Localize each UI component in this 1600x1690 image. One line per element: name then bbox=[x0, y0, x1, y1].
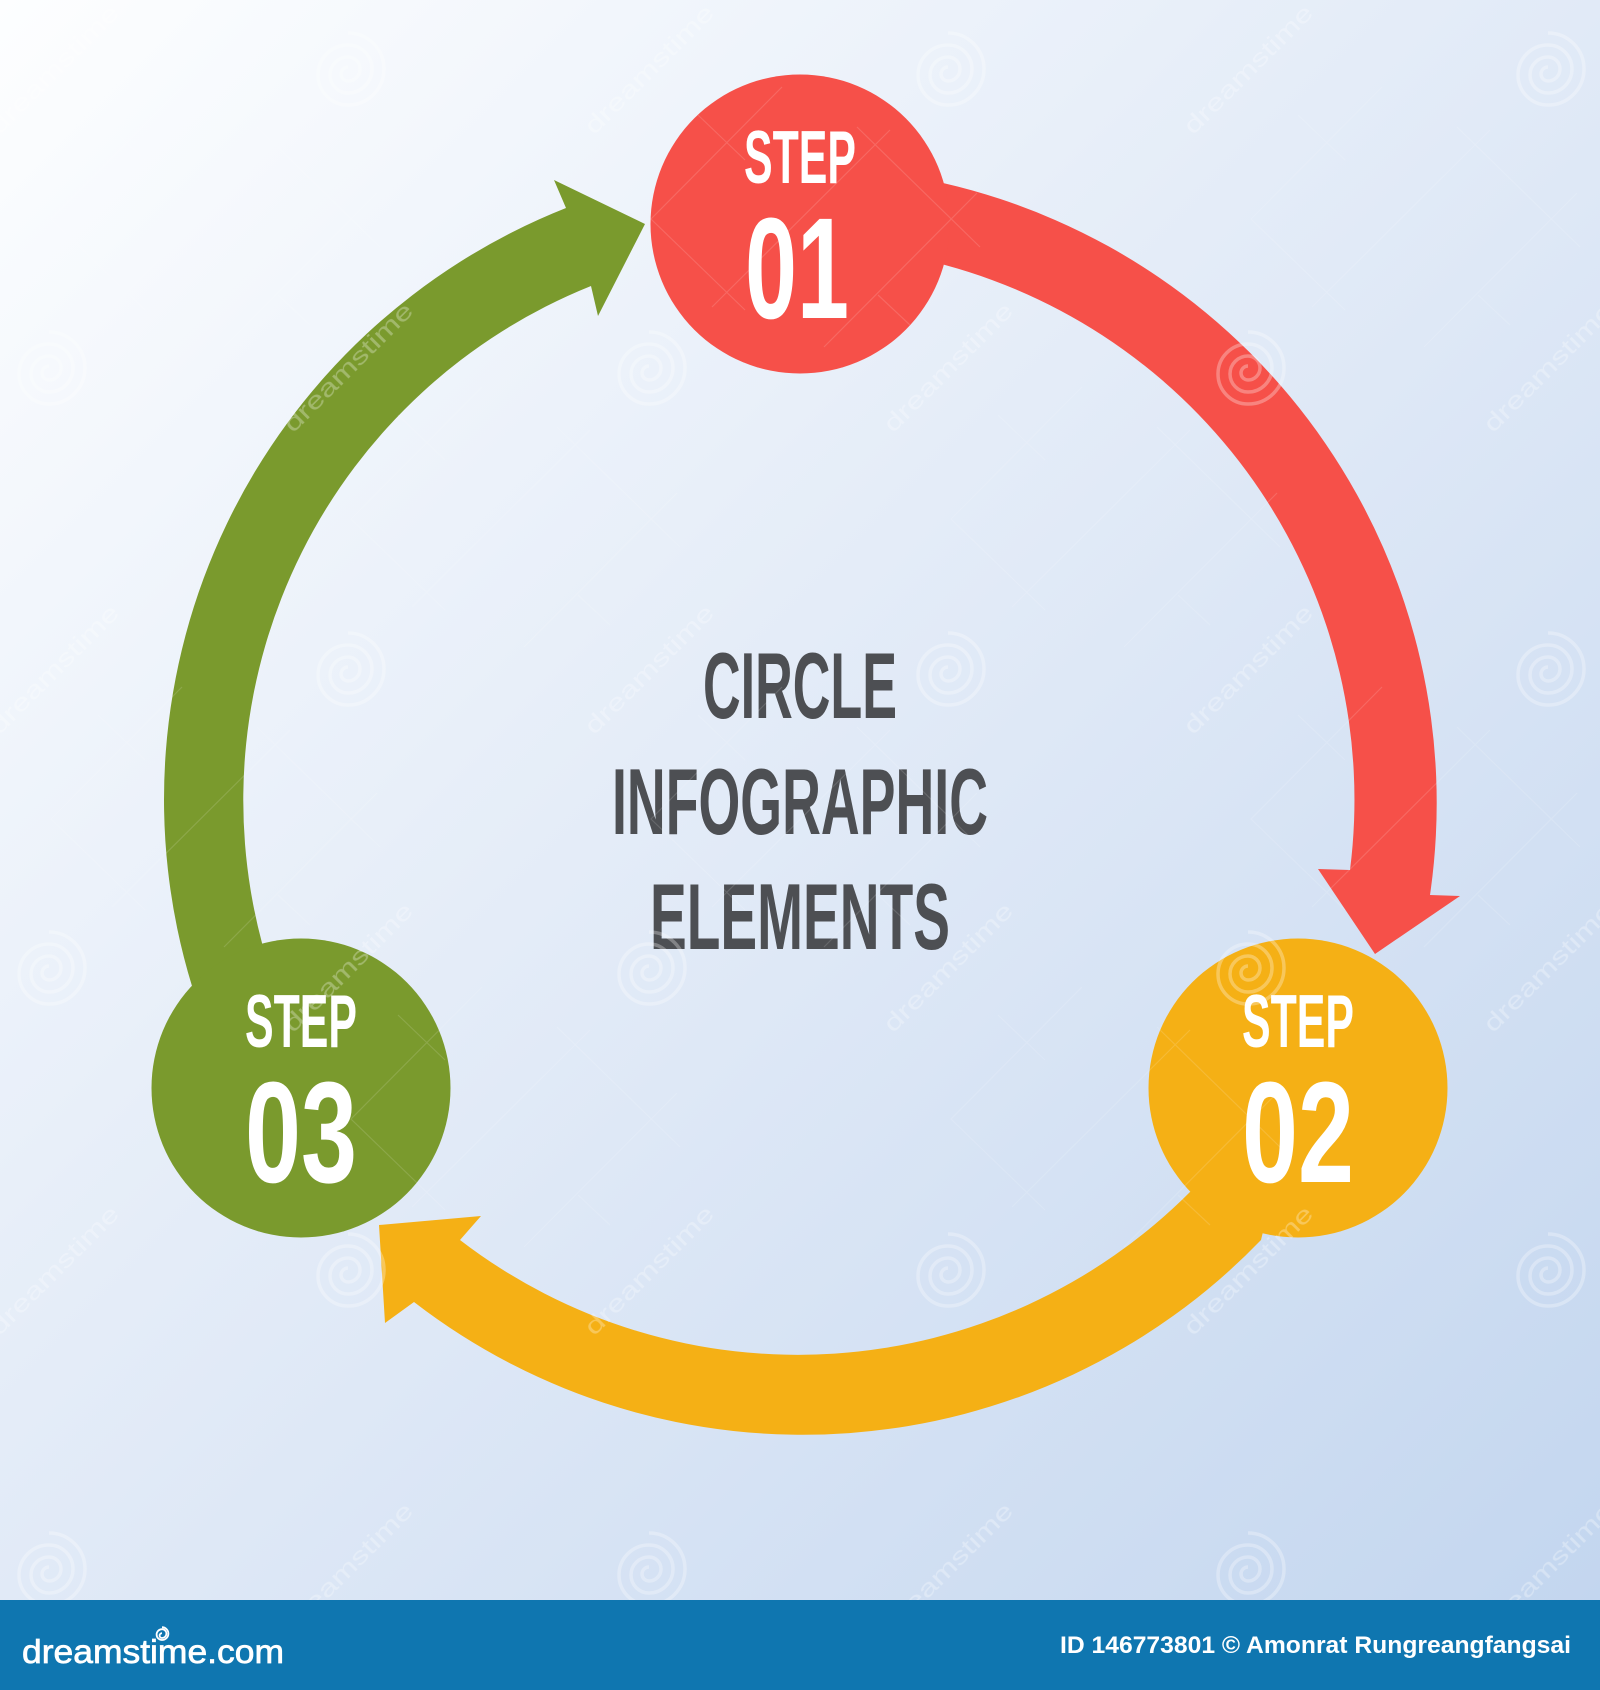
footer bar bbox=[0, 1600, 1600, 1690]
watermark overlay: dreamstime bbox=[878, 1497, 1019, 1638]
watermark overlay: dreamstime bbox=[579, 599, 720, 740]
watermark overlay: dreamstime bbox=[278, 1497, 419, 1638]
watermark overlay: dreamstime bbox=[878, 297, 1019, 438]
watermark overlay: dreamstime bbox=[278, 297, 419, 438]
arrow: green, step 3 to step 1 bbox=[164, 180, 645, 1088]
step 2 badge: STEP bbox=[1242, 979, 1354, 1063]
watermark overlay: dreamstime bbox=[579, 1200, 720, 1341]
step 1 badge: STEP bbox=[744, 115, 856, 199]
center title: CIRCLE bbox=[703, 633, 897, 738]
arrow: red, step 1 to step 2 bbox=[800, 183, 1460, 954]
step 2 badge: 02 bbox=[1242, 1052, 1354, 1213]
center title bbox=[612, 633, 988, 969]
step 3 badge bbox=[152, 938, 450, 1238]
watermark overlay: dreamstime bbox=[1478, 1497, 1600, 1638]
step 1 badge bbox=[650, 74, 950, 374]
watermark overlay: dreamstime bbox=[1178, 1200, 1319, 1341]
footer logo: dreamstime.com bbox=[22, 1633, 284, 1670]
step 3 badge: 03 bbox=[245, 1052, 357, 1213]
center title: ELEMENTS bbox=[650, 864, 950, 969]
footer credit: ID 146773801 © Amonrat Rungreangfangsai bbox=[1060, 1632, 1571, 1659]
step 1 badge: 01 bbox=[745, 188, 849, 349]
arrow: yellow, step 2 to step 3 bbox=[379, 1088, 1298, 1435]
watermark overlay: dreamstime bbox=[579, 0, 720, 140]
step 3 badge: STEP bbox=[245, 979, 357, 1063]
watermark overlay: dreamstime bbox=[878, 897, 1019, 1038]
watermark overlay: dreamstime bbox=[1478, 297, 1600, 438]
watermark overlay: dreamstime bbox=[1478, 897, 1600, 1038]
center title: INFOGRAPHIC bbox=[612, 749, 988, 854]
watermark overlay: dreamstime bbox=[1178, 0, 1319, 140]
watermark overlay: dreamstime bbox=[1178, 599, 1319, 740]
watermark overlay: dreamstime bbox=[278, 897, 419, 1038]
step 2 badge bbox=[1148, 938, 1448, 1238]
